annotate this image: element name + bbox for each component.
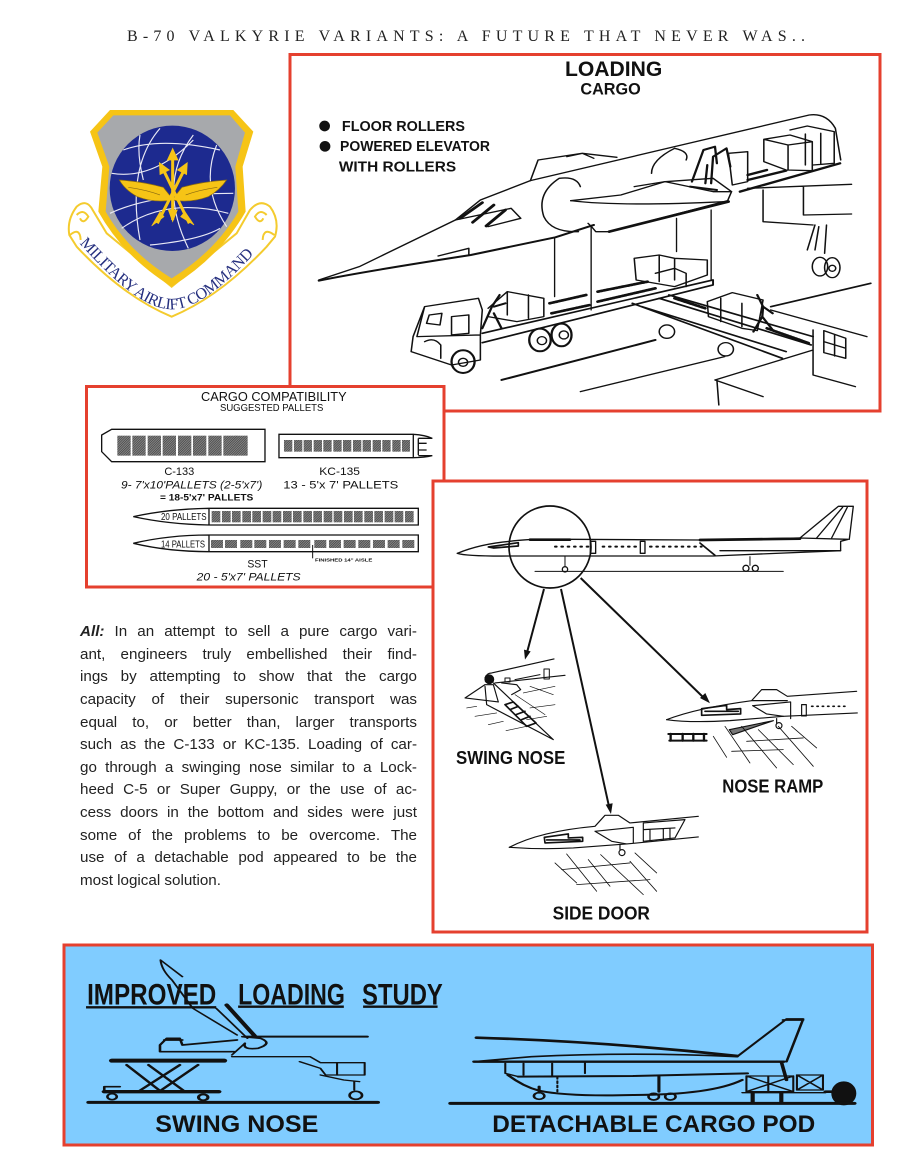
diagram: SST 14 pallets: FINISHED 14" AISLE	[315, 558, 373, 564]
arrow: to swing nose	[524, 589, 544, 660]
arrow: to nose ramp	[581, 578, 710, 703]
text block: article paragraph: capacity of their supersonic transport was	[80, 691, 417, 708]
scroll banner	[69, 203, 277, 317]
bullet list: loading features: POWERED ELEVATOR	[340, 139, 490, 155]
text block: article paragraph: such as the C-133 or KC-135. Loading of car-	[80, 736, 417, 753]
banner text: MILITARY AIRLIFT COMMAND	[80, 236, 252, 310]
heading: cargo compatibility	[201, 390, 347, 414]
text block: article paragraph: All: In an attempt to sell a pure cargo vari-	[80, 623, 417, 640]
diagram: KC-135 pallets	[279, 434, 432, 491]
bullet list: loading features	[319, 119, 490, 175]
diagram: KC-135 pallets: 13 - 5'x 7' PALLETS	[283, 479, 399, 491]
label: side door: SIDE DOOR	[553, 903, 650, 924]
diagram: C-133 pallets: C-133	[164, 466, 194, 478]
label: swing nose: SWING NOSE	[155, 1111, 318, 1137]
bullet list: loading features: FLOOR ROLLERS	[342, 119, 465, 135]
shield	[90, 110, 253, 287]
panel: loading cargo	[290, 54, 880, 411]
emblem: wings and arrows	[119, 148, 227, 226]
heading: loading cargo: CARGO	[580, 80, 641, 98]
illustration: cargo truck and conveyor	[411, 255, 813, 373]
label: swing nose: SWING NOSE	[456, 747, 565, 768]
heading: improved loading study: LOADING	[238, 978, 345, 1011]
globe	[110, 126, 235, 251]
diagram: SST 14 pallets: 14 PALLETS	[161, 539, 205, 550]
diagram: SST 20 pallets	[133, 508, 418, 525]
diagram: C-133 pallets	[102, 429, 265, 503]
illustration: swing nose loading	[89, 960, 378, 1102]
label: nose ramp: NOSE RAMP	[722, 776, 823, 797]
text block: article paragraph: ings by attempting to show that the cargo	[80, 668, 417, 685]
caption: SST pallets: SST	[247, 558, 268, 570]
text block: article paragraph: cess doors in the bottom and sides were just	[80, 804, 417, 821]
heading: cargo compatibility: SUGGESTED PALLETS	[220, 403, 324, 414]
diagram: SST 20 pallets: 20 PALLETS	[161, 512, 207, 523]
caption: SST pallets	[196, 558, 301, 584]
diagram: C-133 pallets: 9- 7'x10'PALLETS (2-5'x7')	[121, 479, 263, 491]
illustration: ground and building	[502, 283, 871, 405]
panel: nose loading options	[433, 481, 867, 932]
arrow: to side door	[561, 589, 613, 814]
text block: article paragraph: go through a swinging nose similar to a Lock-	[80, 759, 417, 776]
title: B-70 VALKYRIE VARIANTS: A FUTURE THAT NEVER WAS..	[127, 28, 805, 45]
diagram: C-133 pallets: = 18-5'x7' PALLETS	[160, 493, 253, 503]
illustration: detachable cargo pod	[451, 1019, 855, 1105]
text block: article paragraph: heed C-5 or Super Guppy, or the use of ac-	[80, 781, 417, 798]
illustration: side view airliner with detail circle	[457, 506, 853, 588]
diagram: KC-135 pallets: KC-135	[319, 466, 360, 478]
heading: cargo compatibility: CARGO COMPATIBILITY	[201, 390, 347, 404]
text block: article paragraph: use of a detachable pod appeared to be the	[80, 849, 417, 866]
heading: loading cargo	[565, 57, 662, 98]
text block: article paragraph: equal to, or better than, larger transports	[80, 714, 417, 731]
illustration: side door	[509, 815, 698, 895]
illustration: nose ramp	[667, 690, 857, 768]
illustration: swing nose	[465, 659, 565, 740]
text block: article paragraph: most logical solution.	[80, 872, 221, 889]
illustration: aircraft with raised fuselage	[319, 115, 852, 310]
panel: improved loading study	[64, 945, 872, 1145]
text block: article paragraph: ant, engineers truly embellished their find-	[80, 646, 417, 663]
bullet list: loading features: WITH ROLLERS	[339, 160, 456, 175]
diagram: SST 14 pallets	[133, 535, 418, 564]
logo: Military Airlift Command shield	[68, 110, 278, 318]
heading: improved loading study: STUDY	[362, 978, 443, 1011]
text block: article paragraph: some of the problems to be overcome. The	[80, 827, 417, 844]
heading: improved loading study: IMPROVED	[87, 978, 216, 1011]
text block: article paragraph	[80, 623, 417, 889]
heading: loading cargo: LOADING	[565, 57, 662, 81]
panel: cargo compatibility	[86, 386, 444, 587]
caption: SST pallets: 20 - 5'x7' PALLETS	[196, 572, 301, 584]
